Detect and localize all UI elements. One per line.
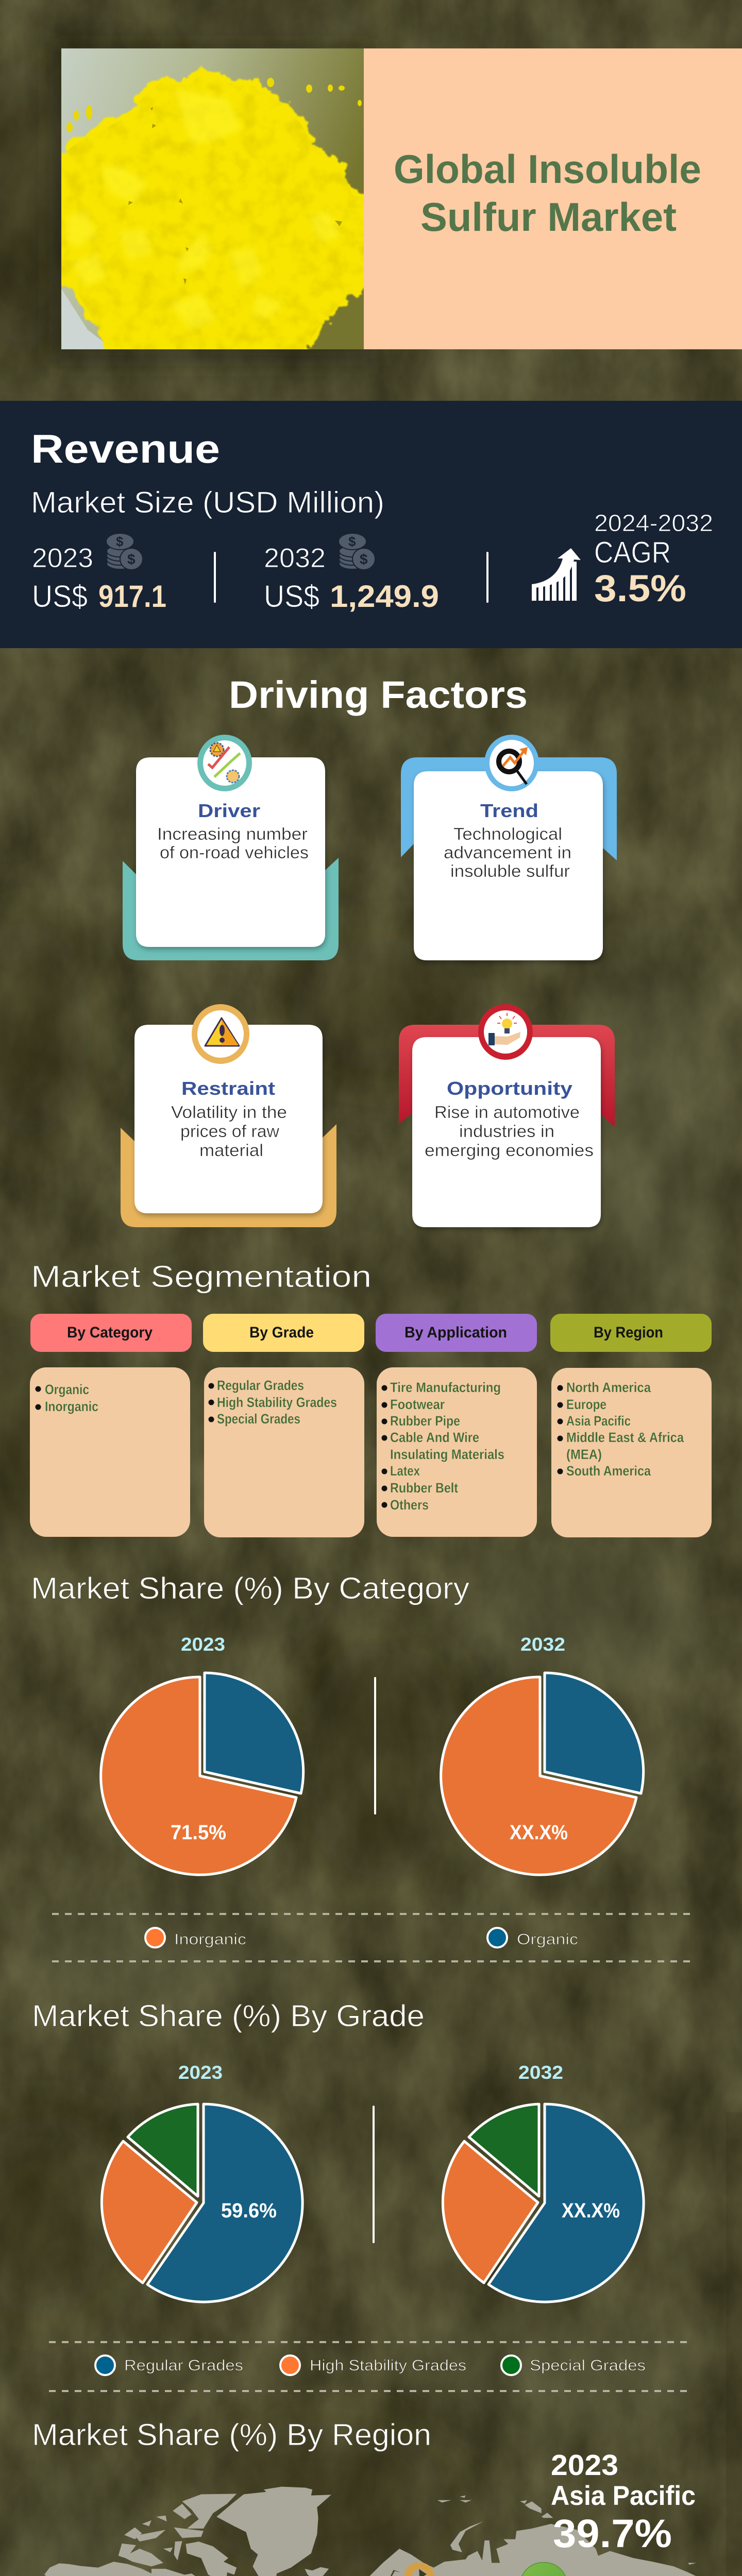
callout: asia pacific share — [551, 2449, 696, 2556]
legend: category: Organic — [517, 1931, 578, 1948]
opportunity text — [425, 1103, 594, 1160]
card: driver — [123, 735, 339, 960]
panel: by region: South America — [566, 1463, 651, 1479]
pie chart: grade 2032: 2032 — [518, 2062, 563, 2083]
panel: by region: North America — [566, 1380, 651, 1395]
card: opportunity — [399, 1004, 615, 1227]
title — [394, 146, 701, 240]
panel: by category: Inorganic — [45, 1399, 98, 1414]
panel: by region: Middle East & Africa — [566, 1430, 684, 1445]
world map — [42, 2487, 712, 2576]
panel: by region: (MEA) — [566, 1447, 602, 1462]
map: eurasia, africa and oceania — [368, 2496, 712, 2576]
CAGR — [594, 510, 713, 609]
hero title panel — [364, 48, 742, 349]
pie chart: grade 2032 — [443, 2062, 644, 2302]
icon: coins 2023: $ — [127, 551, 136, 567]
heading: market segmentation: Market Segmentation — [31, 1260, 372, 1294]
card: trend — [401, 735, 617, 960]
title: Global Insoluble — [394, 146, 701, 192]
hero shadow — [49, 46, 379, 366]
divider — [373, 2106, 375, 2243]
pie chart: category 2032: XX.X% — [510, 1821, 568, 1844]
value 2023: 917.1 — [98, 579, 166, 614]
panel: by application: Tire Manufacturing — [390, 1380, 501, 1395]
panel: by application — [376, 1314, 537, 1537]
callout: asia pacific share: 39.7% — [553, 2512, 672, 2556]
icon: market gears — [197, 735, 252, 791]
legend: category: Inorganic — [174, 1931, 246, 1948]
restraint text — [171, 1103, 287, 1160]
panel: by category: By Category — [67, 1324, 153, 1341]
value 2023: US$ — [32, 579, 88, 614]
card: restraint — [121, 1004, 336, 1227]
hero photo: sulfur powder — [61, 48, 364, 349]
value 2032: 1,249.9 — [330, 579, 439, 614]
value 2032 — [264, 543, 439, 614]
opportunity text: Rise in automotive — [434, 1103, 580, 1122]
trend heading: Trend — [480, 800, 538, 821]
panel: by region — [550, 1314, 712, 1537]
panel: by grade: High Stability Grades — [217, 1395, 337, 1410]
panel: by grade: Special Grades — [217, 1411, 300, 1427]
panel: by region: Asia Pacific — [566, 1413, 631, 1429]
market size label: Market Size (USD Million) — [31, 486, 384, 519]
pie chart: grade 2023: 2023 — [178, 2062, 223, 2083]
pin: europe — [404, 2563, 434, 2576]
icon: bulb and hand — [478, 1004, 533, 1060]
panel: by grade: By Grade — [249, 1324, 314, 1341]
pie chart: category 2023: 71.5% — [171, 1821, 226, 1844]
icon: coins 2032 — [339, 533, 375, 570]
icon: coins 2023 — [106, 533, 143, 570]
panel: by application: Rubber Pipe — [390, 1413, 460, 1429]
panel: by grade — [203, 1314, 364, 1537]
opportunity text: industries in — [459, 1122, 554, 1141]
panel: by application: Cable And Wire — [390, 1430, 479, 1445]
pie chart: grade 2023: 59.6% — [221, 2199, 277, 2222]
panel: by region: Europe — [566, 1397, 606, 1412]
icon: trend magnifier — [484, 735, 539, 791]
value 2023 — [32, 543, 166, 614]
panel: by application: Footwear — [390, 1397, 445, 1412]
pie chart: category 2032 — [441, 1634, 644, 1875]
panel: by grade: Regular Grades — [217, 1378, 304, 1393]
divider — [486, 552, 488, 603]
panel: by application: By Application — [404, 1324, 507, 1341]
CAGR: 3.5% — [594, 568, 686, 609]
map: americas and greenland — [42, 2487, 371, 2576]
divider — [214, 552, 216, 603]
legend: grade: Special Grades — [530, 2357, 646, 2374]
restraint text: Volatility in the — [171, 1103, 287, 1122]
trend text: advancement in — [444, 843, 571, 862]
legend: category — [145, 1928, 578, 1948]
icon: coins 2032: $ — [360, 551, 368, 567]
driver heading: Driver — [198, 800, 260, 821]
title: Sulfur Market — [420, 194, 677, 240]
restraint heading: Restraint — [181, 1078, 275, 1099]
panel: by category — [30, 1314, 192, 1537]
restraint text: prices of raw — [180, 1122, 279, 1141]
panel: by category: Organic — [45, 1382, 89, 1397]
driver text — [157, 824, 309, 862]
panel: by region: By Region — [594, 1324, 663, 1341]
legend: grade — [95, 2355, 646, 2375]
icon: coins 2032: $ — [348, 534, 356, 549]
CAGR: CAGR — [594, 536, 671, 569]
heading: market share by region: Market Share (%) By Region — [32, 2418, 431, 2452]
panel: by application: Insulating Materials — [390, 1447, 504, 1462]
opportunity heading: Opportunity — [447, 1078, 572, 1099]
pin: asia pacific — [520, 2563, 567, 2576]
heading: driving factors: Driving Factors — [229, 673, 528, 716]
pie chart: grade 2032: XX.X% — [562, 2199, 620, 2222]
restraint text: material — [199, 1141, 263, 1160]
panel: by application: Rubber Belt — [390, 1480, 458, 1496]
callout: asia pacific share: 2023 — [551, 2449, 618, 2482]
opportunity text: emerging economies — [425, 1141, 594, 1160]
value 2032: 2032 — [264, 543, 326, 573]
trend text — [444, 824, 571, 880]
panel: by application: Others — [390, 1497, 429, 1513]
pie chart: category 2023 — [101, 1634, 303, 1875]
revenue heading: Revenue — [31, 426, 220, 471]
heading: market share by category: Market Share (%) By Category — [31, 1571, 470, 1605]
pie chart: grade 2023 — [102, 2062, 302, 2302]
legend: grade: Regular Grades — [124, 2357, 243, 2374]
icon: coins 2023: $ — [116, 534, 124, 549]
legend: grade: High Stability Grades — [310, 2357, 466, 2374]
heading: market share by grade: Market Share (%) By Grade — [32, 1999, 425, 2033]
trend text: insoluble sulfur — [450, 861, 570, 880]
value 2032: US$ — [264, 579, 319, 614]
pie chart: category 2023: 2023 — [181, 1634, 225, 1655]
icon: growth arrow — [532, 548, 581, 601]
trend text: Technological — [453, 824, 562, 843]
callout: asia pacific share: Asia Pacific — [551, 2481, 696, 2511]
CAGR: 2024-2032 — [594, 510, 713, 536]
pie chart: category 2032: 2032 — [520, 1634, 565, 1655]
value 2023: 2023 — [32, 543, 93, 573]
driver text: of on-road vehicles — [160, 843, 309, 862]
panel: by application: Latex — [390, 1463, 420, 1479]
revenue band — [0, 401, 742, 648]
icon: warning triangle — [192, 1004, 249, 1064]
divider — [374, 1677, 376, 1815]
driver text: Increasing number — [157, 824, 308, 843]
